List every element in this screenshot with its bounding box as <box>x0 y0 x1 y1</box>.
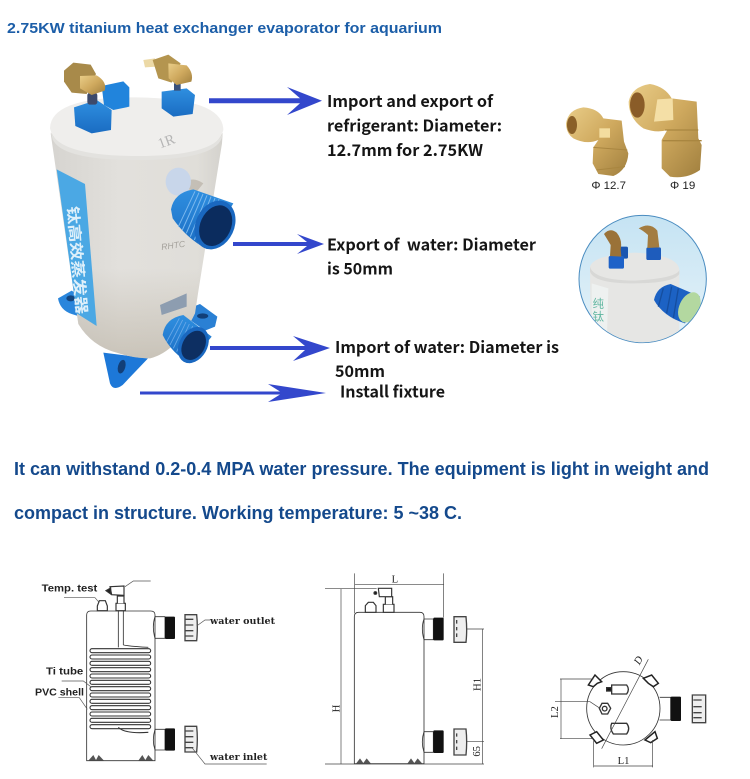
top circle <box>587 672 660 745</box>
blue refrigerant socket right <box>162 88 195 117</box>
label pvc shell: PVC shell <box>35 687 84 698</box>
shell outline <box>87 611 155 761</box>
dimension label L2: L2 <box>550 706 561 718</box>
arrow: install fixture <box>140 384 326 402</box>
label phi 12.7: Φ 12.7 <box>591 180 626 192</box>
back right mounting flange <box>190 304 217 331</box>
cylinder top cap <box>50 97 223 160</box>
diagram: internal structure <box>35 581 276 764</box>
photo: titanium evaporator cylinder <box>50 55 243 388</box>
temperature probe fitting <box>97 601 107 611</box>
dimension label 65: 65 <box>472 746 483 757</box>
circular close-up photo: 钛 <box>593 309 605 325</box>
blue product label <box>57 169 97 326</box>
circular close-up photo: 纯 <box>593 295 604 311</box>
callout: water import: 50mm <box>335 358 385 382</box>
label ti tube: Ti tube <box>46 667 84 678</box>
dimension label H1: H1 <box>473 678 484 691</box>
upper water outlet port: RHTC <box>161 239 186 252</box>
dimension lines <box>325 573 484 764</box>
label ti tube <box>46 667 92 687</box>
dimension label D: D <box>632 654 646 668</box>
arrow: refrigerant <box>209 87 322 115</box>
mounting feet <box>88 755 153 761</box>
callout: water export: Export of water: Diameter <box>327 232 536 256</box>
lower port <box>153 726 197 752</box>
callout: install fixture: Install fixture <box>340 378 445 402</box>
upper water outlet port <box>161 168 243 256</box>
back left mounting flange <box>58 291 83 317</box>
dimension lines <box>555 659 653 767</box>
brass refrigerant fitting left <box>64 63 105 105</box>
titanium coil <box>90 649 151 733</box>
callout: refrigerant port <box>327 88 502 161</box>
label temp test <box>42 581 151 603</box>
callout: refrigerant port: Import and export of <box>327 88 494 112</box>
side port <box>660 695 706 723</box>
lower water inlet port <box>160 293 215 369</box>
front mounting flange <box>103 353 148 388</box>
dimension label H: H <box>331 704 342 712</box>
upper port <box>422 617 467 642</box>
body outline <box>354 612 424 764</box>
arrow: water export <box>233 234 324 254</box>
brass refrigerant fitting right <box>143 55 192 91</box>
circular close-up photo <box>579 215 706 347</box>
mounting lugs <box>588 675 658 743</box>
blue product label: 钛高效蒸发器 <box>62 205 93 315</box>
callout: water import: Import of water: Diameter is <box>335 334 559 358</box>
cylinder body <box>51 133 223 358</box>
label phi 19: Φ 19 <box>670 180 695 192</box>
label pvc shell <box>35 687 87 709</box>
callout: refrigerant port: 12.7mm for 2.75KW <box>327 137 483 161</box>
label water outlet: water outlet <box>209 617 276 627</box>
cylinder top cap: 1R <box>156 131 178 152</box>
brass elbow 19 <box>629 84 702 177</box>
callout: water import <box>335 334 559 382</box>
upper port <box>153 615 197 641</box>
arrow: water import <box>210 336 330 361</box>
label temp test: Temp. test <box>42 583 98 594</box>
callout: refrigerant port: refrigerant: Diameter: <box>327 112 502 136</box>
diagram: side dimensions <box>325 573 484 764</box>
blue refrigerant socket front left <box>74 100 112 133</box>
label water inlet: water inlet <box>209 753 268 763</box>
dimension label L: L <box>392 574 398 585</box>
top fittings <box>599 685 629 734</box>
description paragraph: It can withstand 0.2-0.4 MPA water pressure. The equipment is light in weight and <box>14 459 709 479</box>
callout: water export: is 50mm <box>327 256 393 280</box>
top fittings <box>365 588 394 612</box>
dimension label L1: L1 <box>618 756 630 767</box>
description paragraph: compact in structure. Working temperature: 5 ~38 C. <box>14 503 462 523</box>
elbow fitting <box>106 586 125 611</box>
brass elbow 12.7 <box>566 107 628 176</box>
diagram: top view <box>550 654 706 767</box>
title: 2.75KW titanium heat exchanger evaporator for aquarium <box>7 20 442 37</box>
coil riser tube <box>118 610 148 647</box>
label water inlet <box>192 747 268 764</box>
mounting feet <box>356 758 422 764</box>
photo group: brass elbow fittings and close-up <box>566 84 706 347</box>
lower port <box>422 729 467 755</box>
description paragraph <box>14 459 709 523</box>
callout: water export <box>327 232 536 280</box>
blue refrigerant socket left rear <box>102 81 129 110</box>
